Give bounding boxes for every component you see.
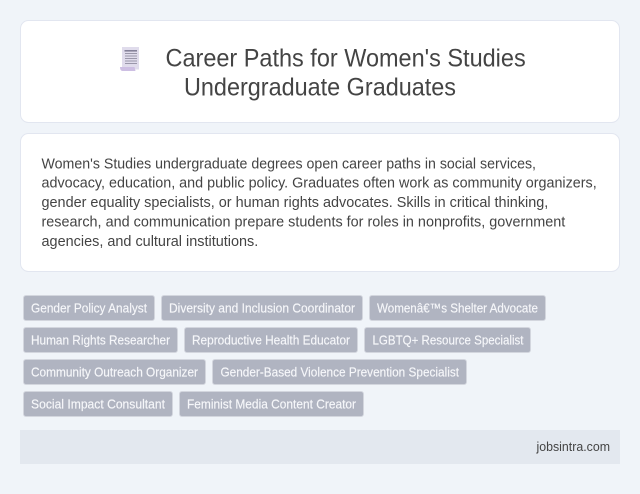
tag: Reproductive Health Educator [184,328,358,352]
title: Undergraduate Graduates [184,74,456,102]
text block: description: agencies, and cultural institutions. [42,234,258,250]
tag: Women's Shelter Advocate [370,296,546,320]
panel: header card [20,20,620,122]
text block: description: gender equality specialists, or human rights advocates. Skills in critical thinking, [42,195,548,211]
tag: Diversity and Inclusion Coordinator: Diversity and Inclusion Coordinator [169,301,355,315]
icon: paper scroll [120,47,139,71]
tag: Community Outreach Organizer [24,360,206,384]
title [166,45,526,102]
tag: Social Impact Consultant: Social Impact Consultant [31,397,165,411]
text block: description: advocacy, education, and public policy. Graduates often work as community organizers, [42,175,597,191]
tag: LGBTQ+ Resource Specialist: LGBTQ+ Resource Specialist [372,333,524,347]
text block: description: Women's Studies undergraduate degrees open career paths in social services, [42,156,536,172]
tag: Social Impact Consultant [24,392,172,416]
tag: LGBTQ+ Resource Specialist [364,328,530,352]
text block: description: research, and communication prepare students for roles in nonprofits, government [42,215,565,231]
tag: Gender Policy Analyst [24,296,154,320]
footer bar [20,430,620,464]
tag: Gender-Based Violence Prevention Specialist [212,360,466,384]
tag: Feminist Media Content Creator [180,392,364,416]
tag: Reproductive Health Educator: Reproductive Health Educator [192,333,350,347]
tag: Community Outreach Organizer: Community Outreach Organizer [31,365,198,379]
tag: Diversity and Inclusion Coordinator [162,296,362,320]
title: Career Paths for Women's Studies [166,45,526,73]
panel: career tags [24,296,546,416]
panel: description card [20,134,620,272]
tag: Gender Policy Analyst: Gender Policy Analyst [31,301,147,315]
text block: description [42,156,597,250]
tag: Human Rights Researcher: Human Rights Researcher [31,333,170,347]
tag: Human Rights Researcher [24,328,178,352]
tag: Gender-Based Violence Prevention Specialist: Gender-Based Violence Prevention Specialist [220,365,459,379]
footer credit: jobsintra.com [536,440,610,454]
tag: Women's Shelter Advocate: Womenâ€™s Shelter Advocate [377,301,538,315]
tag: Feminist Media Content Creator: Feminist Media Content Creator [187,397,356,411]
